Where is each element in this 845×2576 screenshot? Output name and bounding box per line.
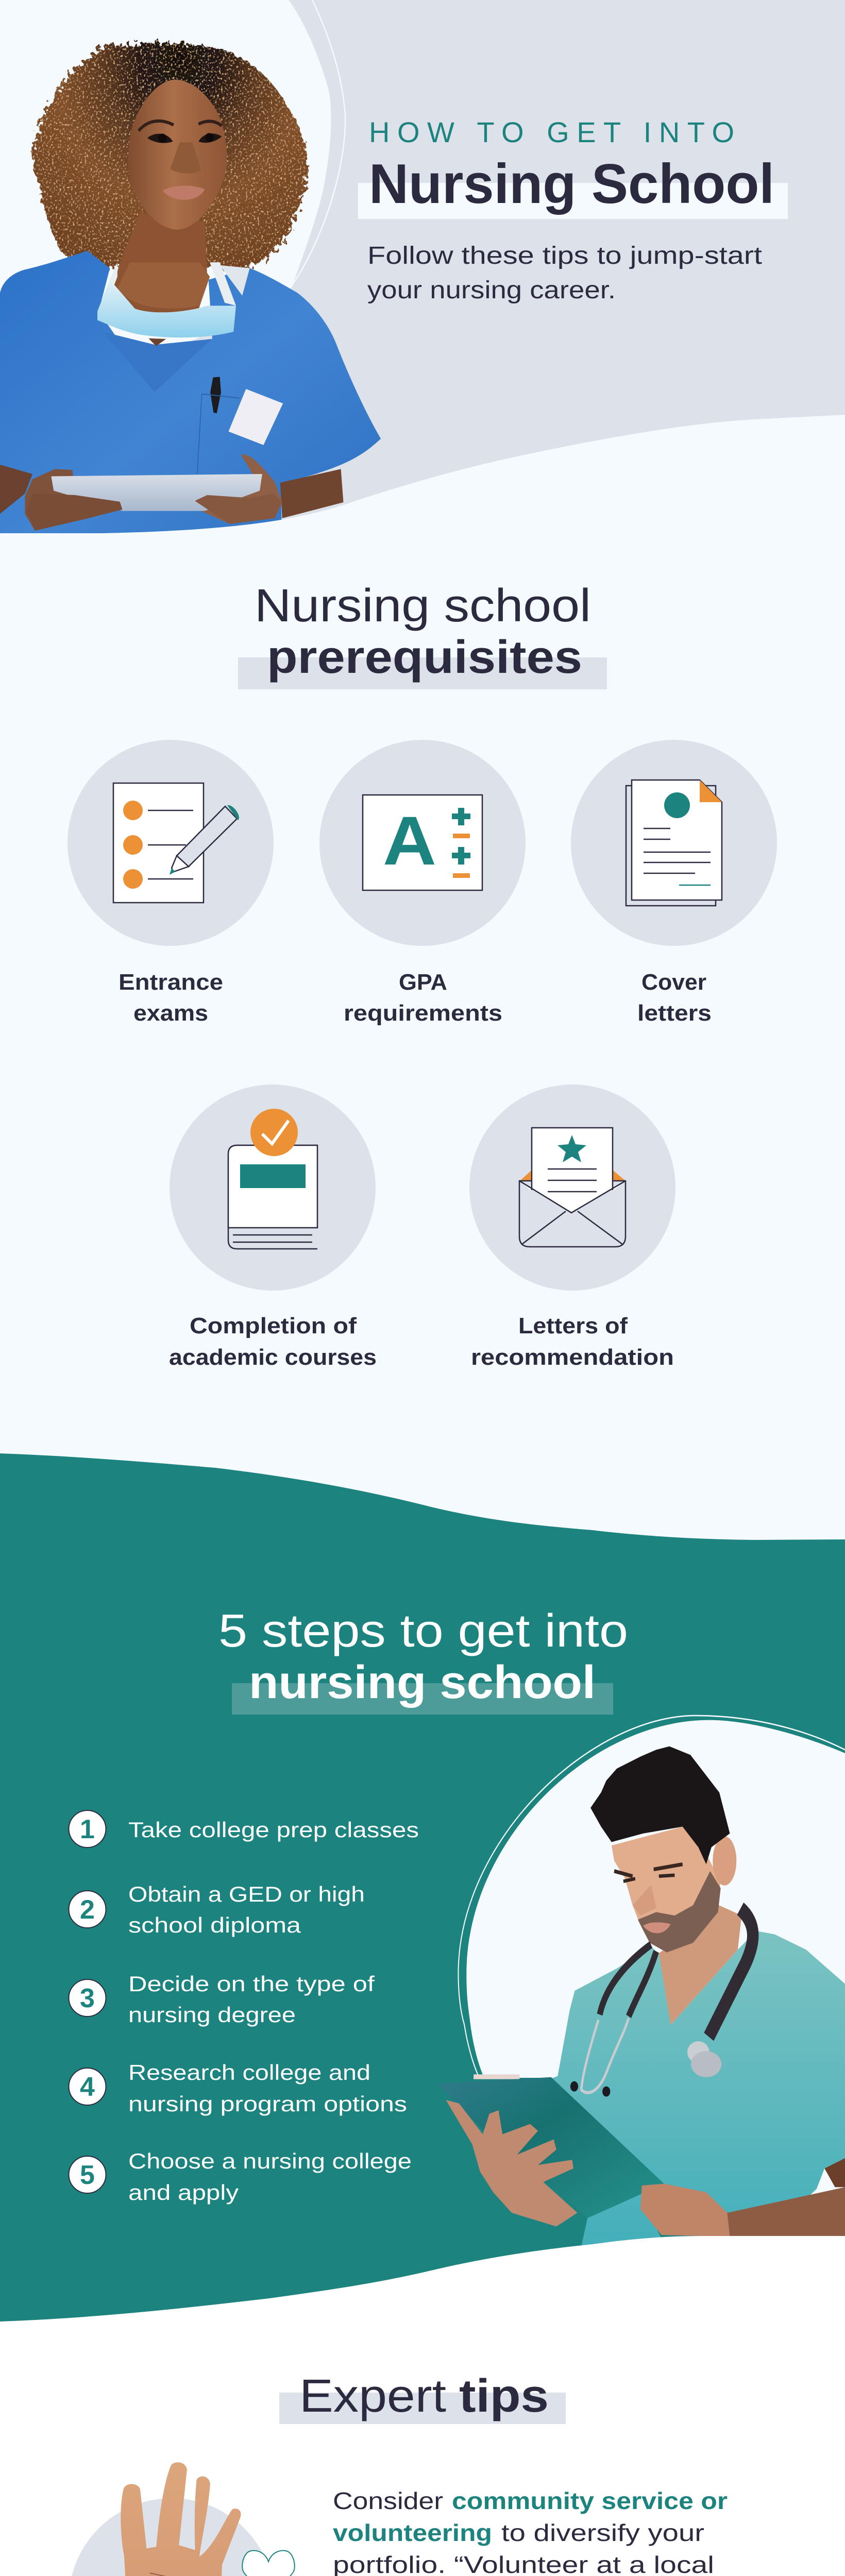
panel: expert tips background (0, 2236, 845, 2576)
step 2: Obtain a GED or high (128, 1882, 365, 1906)
panel: prerequisites (67, 580, 777, 1370)
step 4: 4 (80, 2072, 95, 2102)
label (119, 970, 223, 1026)
title highlight (358, 183, 788, 219)
label (344, 970, 502, 1026)
photo: raised open hand with hearts (63, 2462, 295, 2576)
tip 1: community service (63, 2462, 762, 2576)
hero subtitle (367, 242, 762, 304)
icon: envelope with letter (519, 1128, 626, 1247)
label: academic courses (169, 1345, 377, 1370)
heading: expert tips (279, 2370, 566, 2424)
icon: stacked letters (626, 780, 722, 906)
heading: nursing school prerequisites: Nursing school (255, 580, 591, 632)
heading: nursing school prerequisites (238, 580, 607, 689)
panel: hero (0, 0, 845, 572)
heading: 5 steps to get into nursing school (218, 1605, 628, 1715)
step 2 (69, 1882, 365, 1937)
label: Completion of (190, 1313, 357, 1338)
quote: Consider (333, 2487, 443, 2514)
item: entrance exams (67, 740, 274, 1026)
item: completion of academic courses (169, 1084, 377, 1370)
step 3: 3 (80, 1984, 95, 2013)
wave divider (0, 415, 845, 572)
hero subtitle: your nursing career. (367, 277, 616, 304)
heading: expert tips: Expert (299, 2370, 446, 2422)
page background (0, 0, 845, 1546)
panel: 5 steps (0, 1453, 845, 2370)
label (471, 1313, 674, 1370)
photo: nurse holding tablet (0, 43, 381, 557)
icon: grade paper: A (383, 803, 436, 879)
heading: expert tips: tips (459, 2370, 549, 2422)
step 3: Decide on the type of (128, 1972, 375, 1996)
step 5 (69, 2149, 412, 2205)
label (169, 1313, 377, 1370)
step 2: 2 (80, 1895, 95, 1925)
label: Entrance (119, 970, 223, 995)
step 3 (69, 1972, 375, 2027)
step 1: Take college prep classes (128, 1818, 419, 1842)
icon: grade paper (363, 795, 482, 890)
label: recommendation (471, 1345, 674, 1370)
label (637, 970, 712, 1026)
hero kicker: HOW TO GET INTO (369, 116, 734, 148)
step 1 (69, 1810, 419, 1848)
title: Nursing School (369, 152, 774, 215)
heading: nursing school prerequisites: prerequisites (267, 632, 582, 683)
step 5: Choose a nursing college (128, 2149, 412, 2173)
quote (333, 2487, 762, 2576)
photo: male nurse with clipboard (437, 1716, 845, 2246)
step 5: and apply (128, 2180, 239, 2205)
label: Cover (641, 970, 706, 995)
step 4: nursing program options (128, 2092, 407, 2116)
quote: community service or (452, 2487, 728, 2514)
quote: to diversify your (501, 2519, 704, 2546)
icon: book with check badge (228, 1109, 317, 1249)
hero subtitle: Follow these tips to jump-start (367, 242, 762, 269)
item: cover letters (571, 740, 777, 1026)
icon: test paper and pencil (113, 783, 239, 903)
label: letters (637, 1001, 712, 1026)
step 4: Research college and (128, 2060, 370, 2084)
label: exams (133, 1001, 208, 1026)
item: GPA requirements (319, 740, 526, 1026)
step 2: school diploma (128, 1913, 301, 1937)
heading: 5 steps to get into nursing school: nursing school (249, 1657, 596, 1708)
heading: 5 steps to get into nursing school: 5 steps to get into (218, 1605, 628, 1657)
step 5: 5 (80, 2160, 95, 2190)
label: Letters of (518, 1313, 628, 1338)
label: GPA (399, 970, 447, 995)
step 4 (69, 2060, 407, 2116)
quote: volunteering (333, 2519, 492, 2546)
step 3: nursing degree (128, 2003, 296, 2027)
step 1: 1 (80, 1815, 95, 1844)
item: letters of recommendation (469, 1084, 675, 1370)
label: requirements (344, 1001, 502, 1026)
